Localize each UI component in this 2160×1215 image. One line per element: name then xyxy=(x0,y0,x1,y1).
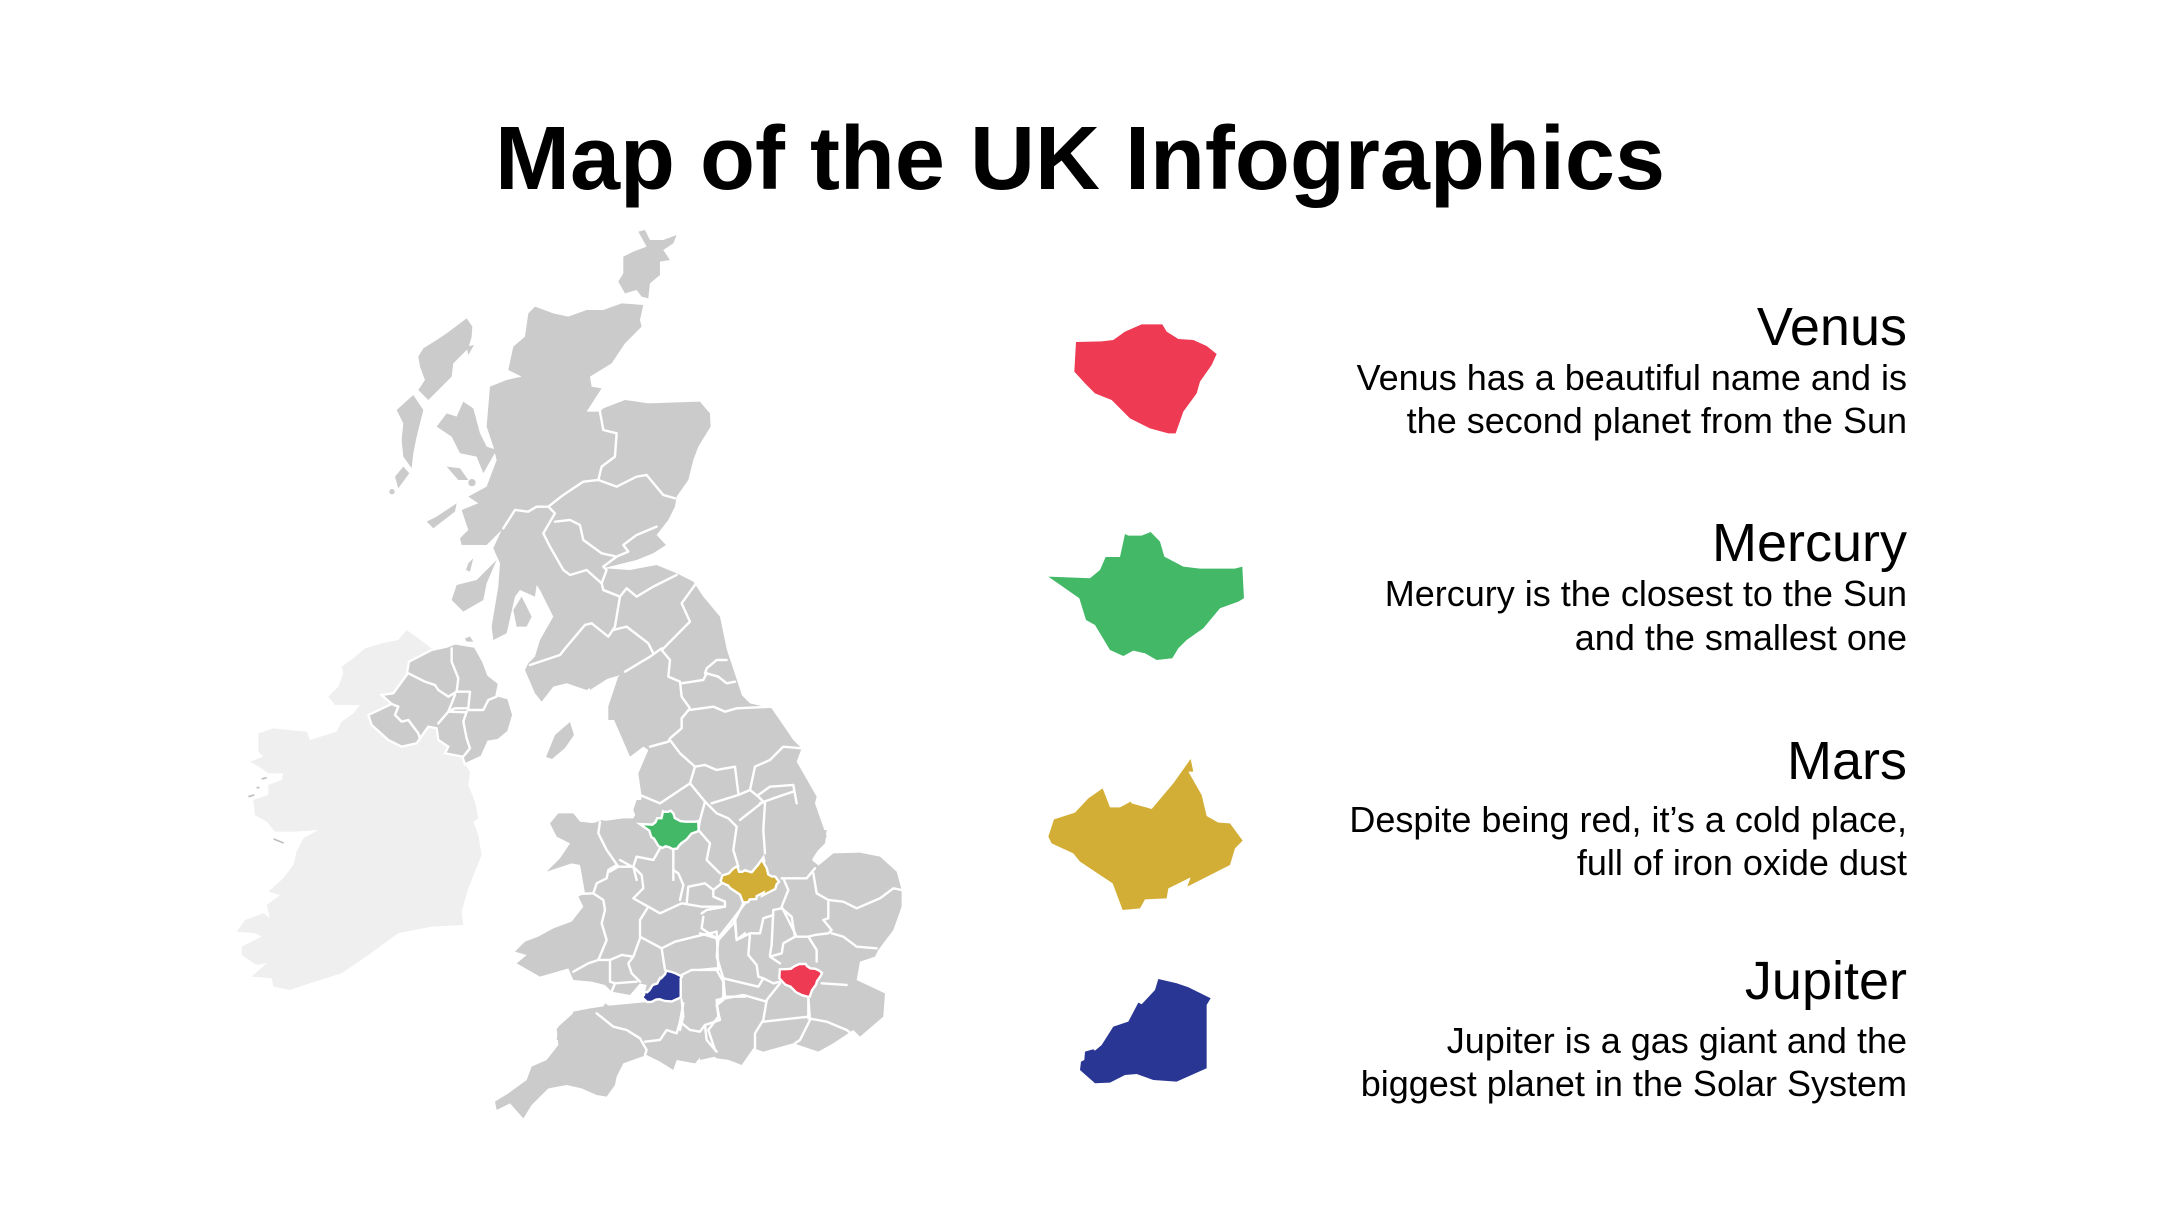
county borders: northern England xyxy=(598,648,802,880)
Ireland landmass xyxy=(237,630,482,990)
icon: gold county shape xyxy=(1048,759,1243,910)
Shetland, Orkney and Hebrides islands xyxy=(389,230,677,627)
panel: Mercury: and the smallest one xyxy=(1575,617,1907,658)
map of the UK and Ireland xyxy=(237,230,902,1118)
map highlight: blue county xyxy=(643,971,682,1002)
Great Britain landmass xyxy=(460,303,902,1118)
map highlight: green county xyxy=(640,811,699,849)
icon: red county shape xyxy=(1074,324,1217,433)
county borders: South West xyxy=(597,1000,723,1055)
Mars description: Despite being red, it’s a cold place, xyxy=(1349,799,1907,840)
county borders: Wales and the Midlands xyxy=(573,860,745,1030)
Mercury heading: Mercury xyxy=(1712,513,1907,573)
map highlight: red county xyxy=(779,964,822,997)
Venus description: Venus has a beautiful name and is xyxy=(1357,357,1907,398)
panel: Venus xyxy=(1074,297,1907,441)
panel: Venus: the second planet from the Sun xyxy=(1407,400,1907,441)
Venus heading: Venus xyxy=(1757,297,1907,357)
county borders: Scotland xyxy=(503,412,695,665)
panel: Mars: full of iron oxide dust xyxy=(1577,842,1907,883)
county borders: East and South East xyxy=(700,868,902,1050)
panel: Jupiter: biggest planet in the Solar System xyxy=(1361,1063,1907,1104)
icon: green county shape xyxy=(1048,532,1244,660)
Jupiter heading: Jupiter xyxy=(1745,951,1907,1011)
Northern Ireland xyxy=(368,637,513,764)
panel: Mercury xyxy=(1048,513,1907,660)
panel: Jupiter xyxy=(1080,951,1907,1104)
Mercury description: Mercury is the closest to the Sun xyxy=(1385,573,1907,614)
Jupiter description: Jupiter is a gas giant and the xyxy=(1447,1020,1907,1061)
Isle of Man xyxy=(546,722,574,759)
map highlight: gold county xyxy=(721,857,779,903)
panel: Mars xyxy=(1048,731,1907,910)
icon: blue county shape xyxy=(1080,979,1211,1083)
Mars heading: Mars xyxy=(1787,731,1907,791)
title: Map of the UK Infographics xyxy=(495,109,1665,209)
